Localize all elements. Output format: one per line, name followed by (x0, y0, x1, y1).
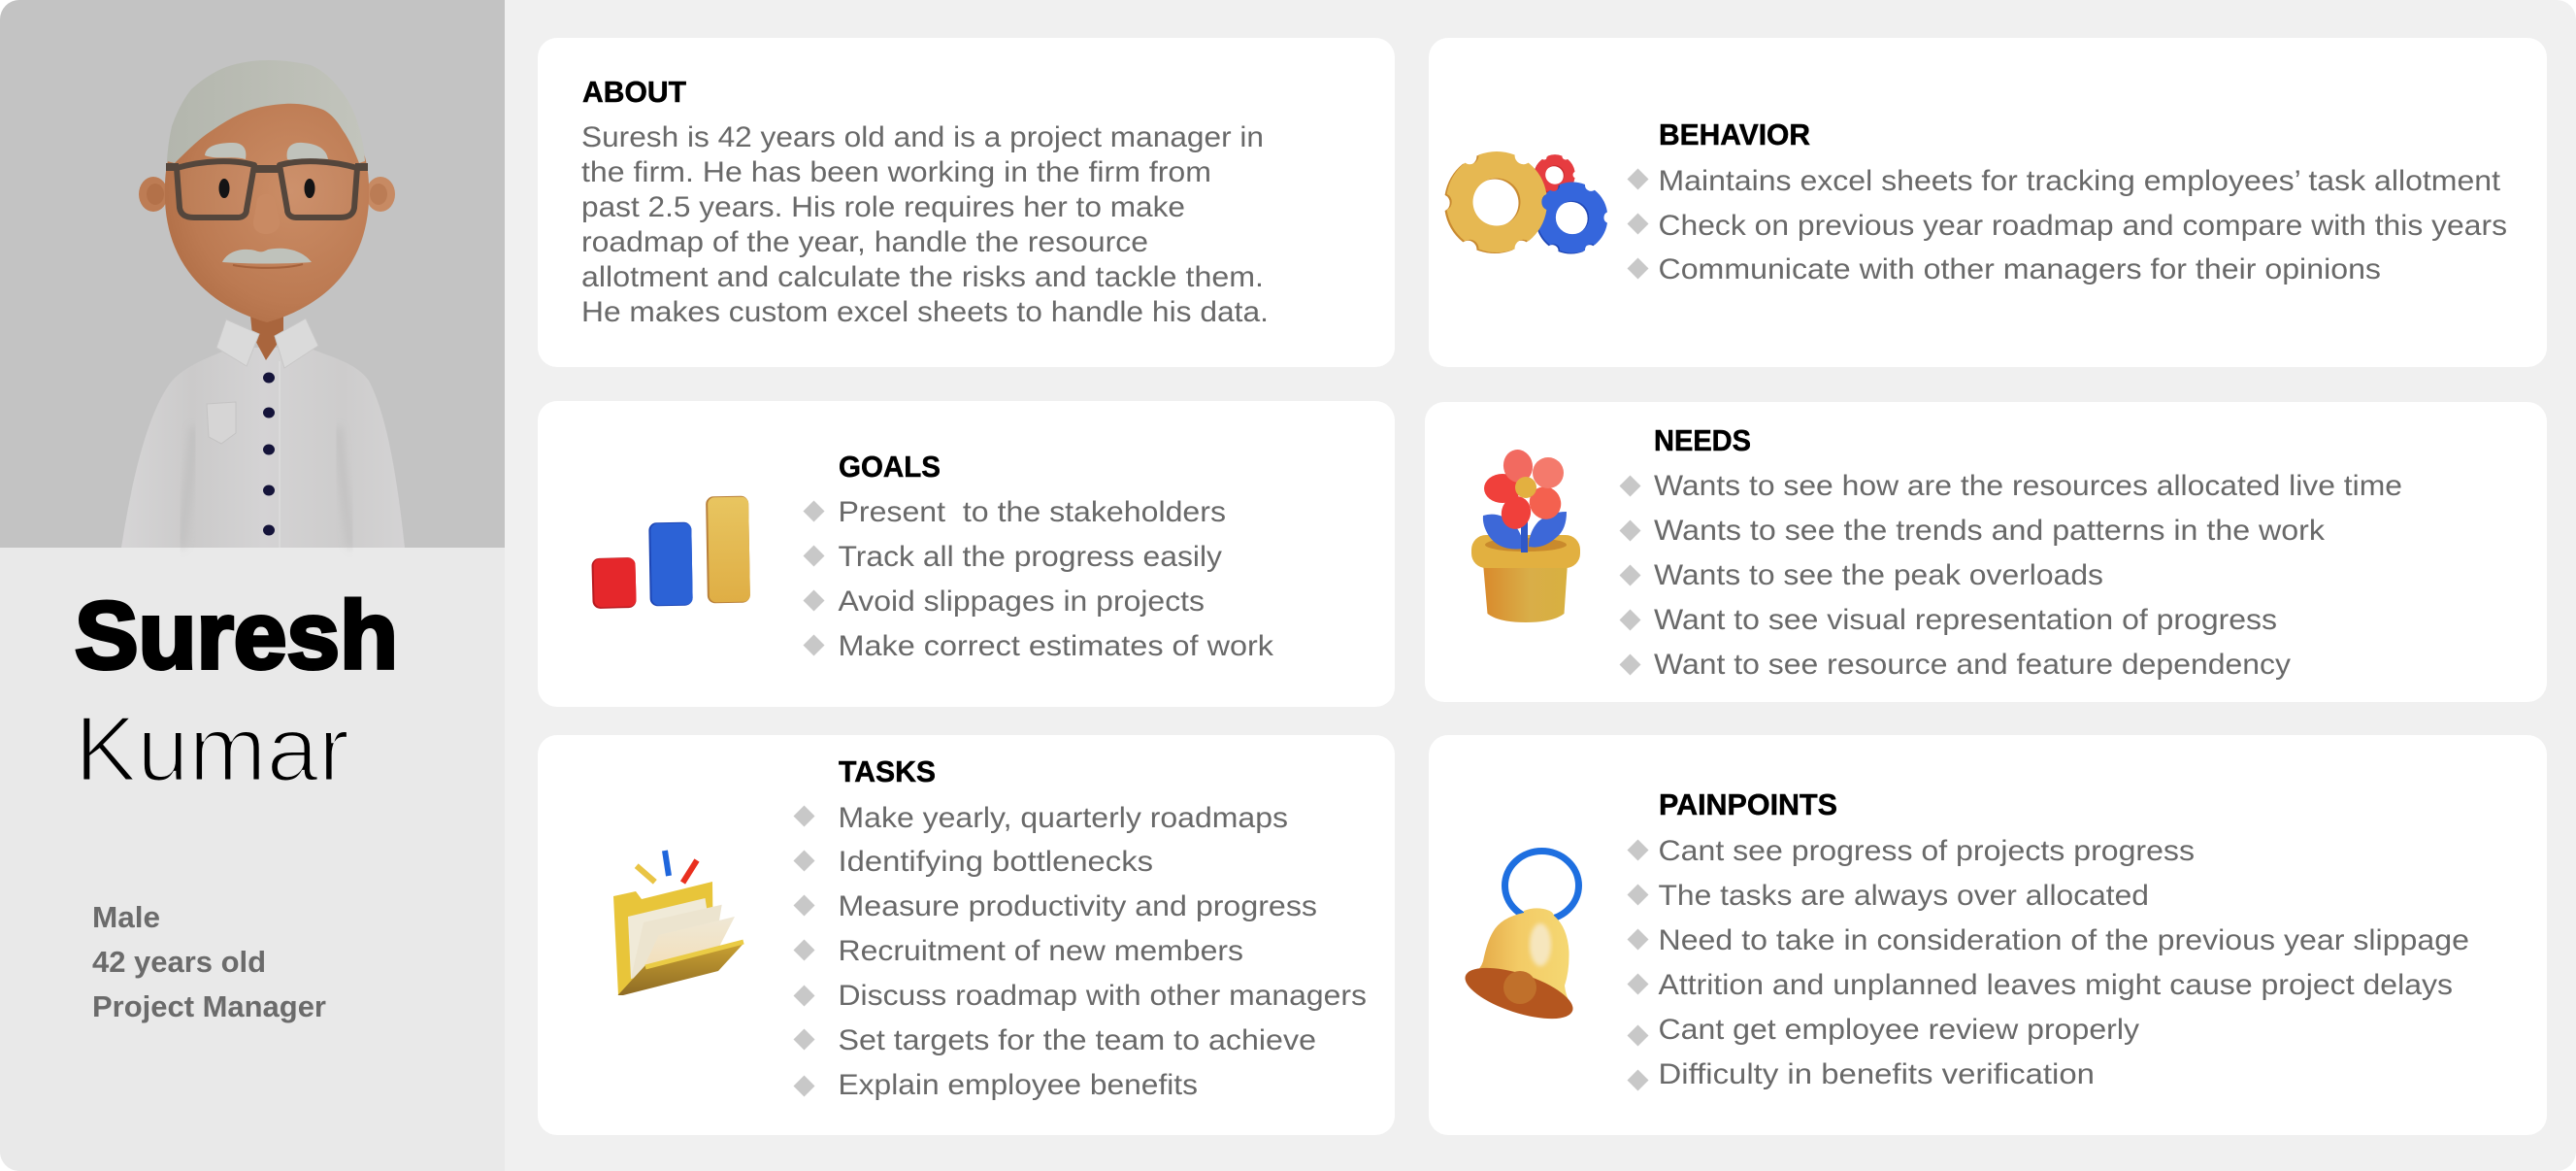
about paragraph: the firm. He has been working in the firm from (581, 156, 1211, 188)
heading: about: ABOUT (582, 75, 686, 109)
heading: tasks: TASKS (839, 754, 936, 788)
panel: behavior (1429, 38, 2547, 367)
icon: folder (613, 851, 743, 995)
bullets: painpoints: The tasks are always over allocated (1658, 880, 2149, 912)
bullets: goals: Make correct estimates of work (839, 630, 1274, 662)
bullets: painpoints: Attrition and unplanned leaves might cause project delays (1658, 969, 2453, 1001)
bullets: tasks: Discuss roadmap with other managers (839, 980, 1367, 1012)
bullets: needs: Wants to see how are the resources allocated live time (1654, 470, 2402, 502)
heading: goals: GOALS (839, 450, 941, 484)
demographics: Male (92, 900, 160, 934)
panel: goals (538, 401, 1395, 707)
icon: gears (1445, 151, 1607, 253)
bullets: goals: Track all the progress easily (839, 541, 1222, 573)
about paragraph: roadmap of the year, handle the resource (581, 226, 1148, 258)
panel: about (538, 38, 1395, 367)
last name: Kumar (75, 697, 349, 801)
demographics: Project Manager (92, 989, 326, 1023)
bullets: behavior: Communicate with other managers for their opinions (1658, 253, 2381, 285)
icon: bell (1460, 851, 1578, 1029)
panel: painpoints (1429, 735, 2547, 1135)
bullets: painpoints: Cant see progress of projects progress (1658, 835, 2195, 867)
about paragraph: allotment and calculate the risks and tackle them. (581, 261, 1264, 293)
panel: tasks (538, 735, 1395, 1135)
bullets: behavior: Check on previous year roadmap and compare with this years (1658, 210, 2507, 242)
about paragraph: He makes custom excel sheets to handle his data. (581, 296, 1269, 328)
bullets: behavior (1627, 165, 2507, 285)
bullets: tasks: Measure productivity and progress (839, 890, 1317, 922)
panel: profile sidebar (0, 0, 505, 1023)
about paragraph: Suresh is 42 years old and is a project manager in (581, 121, 1264, 153)
avatar: Suresh 3D character (121, 60, 405, 548)
heading: painpoints: PAINPOINTS (1659, 787, 1837, 821)
bullets: behavior: Maintains excel sheets for tracking employees’ task allotment (1658, 165, 2501, 197)
bullets: needs: Want to see resource and feature dependency (1654, 649, 2291, 681)
demographics (92, 900, 326, 1023)
panel: needs (1425, 402, 2547, 702)
bullets: tasks (794, 802, 1367, 1101)
heading: behavior: BEHAVIOR (1659, 117, 1810, 151)
bullets: needs: Wants to see the trends and patterns in the work (1654, 515, 2326, 547)
bullets: goals: Present to the stakeholders (839, 496, 1226, 528)
bullets: painpoints: Difficulty in benefits verification (1658, 1058, 2095, 1090)
bullets: goals: Avoid slippages in projects (839, 586, 1205, 618)
demographics: 42 years old (92, 945, 266, 979)
about paragraph: past 2.5 years. His role requires her to make (581, 191, 1185, 223)
bullets: painpoints (1627, 835, 2469, 1091)
bullets: tasks: Make yearly, quarterly roadmaps (839, 802, 1288, 834)
bullets: goals (804, 496, 1274, 662)
bullets: tasks: Set targets for the team to achieve (839, 1024, 1316, 1056)
bullets: painpoints: Need to take in consideration of the previous year slippage (1658, 924, 2469, 956)
first name: Suresh (75, 582, 398, 688)
icon: bar chart (591, 496, 750, 609)
bullets: tasks: Identifying bottlenecks (839, 846, 1153, 878)
bullets: needs: Want to see visual representation of progress (1654, 604, 2277, 636)
bullets: needs: Wants to see the peak overloads (1654, 559, 2103, 591)
bullets: tasks: Recruitment of new members (839, 935, 1243, 967)
icon: flower pot (1471, 448, 1580, 622)
bullets: painpoints: Cant get employee review properly (1658, 1014, 2139, 1046)
heading: needs: NEEDS (1654, 423, 1751, 457)
about paragraph (581, 121, 1269, 328)
bullets: needs (1619, 470, 2402, 681)
bullets: tasks: Explain employee benefits (839, 1069, 1198, 1101)
